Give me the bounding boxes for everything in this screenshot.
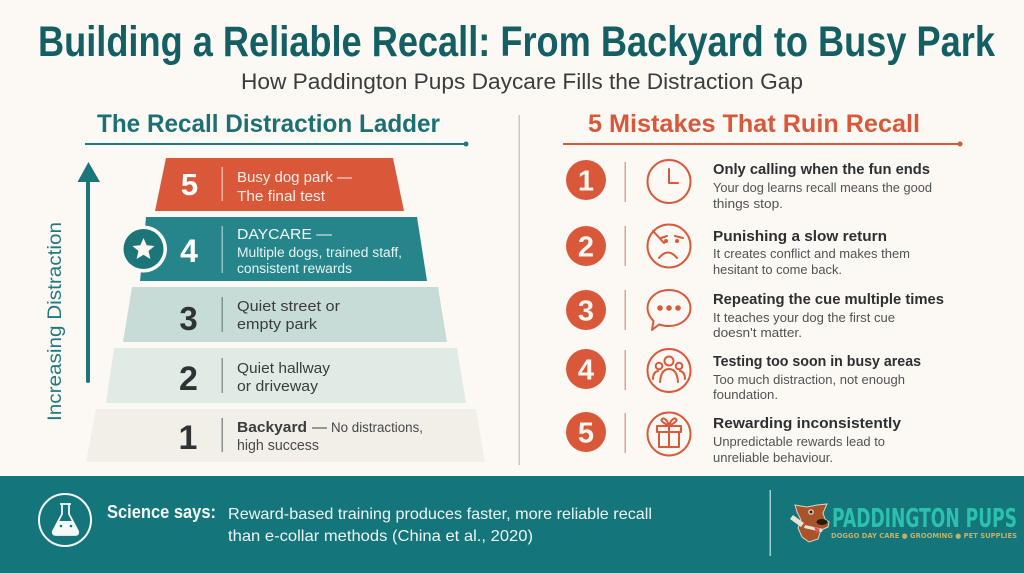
step 4: daycare: DAYCARE — xyxy=(237,226,332,243)
step 2: quiet hallway xyxy=(106,348,466,403)
step 4: daycare xyxy=(140,217,427,281)
step 5: busy dog park: Busy dog park — xyxy=(237,169,352,186)
science says label: Science says: xyxy=(107,502,216,522)
logo: Paddington Pups xyxy=(790,504,1017,542)
step 1: backyard: high success xyxy=(237,437,319,454)
mistake 4 xyxy=(566,349,921,402)
mistake 2: hesitant to come back. xyxy=(713,262,842,277)
icon: group of people xyxy=(648,349,690,392)
icon: sad face xyxy=(648,224,690,268)
heading: ladder: The Recall Distraction Ladder xyxy=(97,110,440,138)
axis label: Increasing Distraction xyxy=(45,222,66,421)
mistake 2: 2 xyxy=(578,232,594,264)
column divider xyxy=(518,115,520,465)
science statement: Reward-based training produces faster, more reliable recall xyxy=(228,506,652,523)
mistake 2: Punishing a slow return xyxy=(713,228,887,245)
mistake 3 xyxy=(566,290,944,340)
mistake 5: 5 xyxy=(578,418,594,450)
step 2: quiet hallway: 2 xyxy=(179,360,198,398)
mistake 3: doesn't matter. xyxy=(713,325,802,340)
step 3: quiet street: 3 xyxy=(179,300,198,337)
icon: clock xyxy=(648,160,690,203)
science statement xyxy=(228,506,652,545)
icon: gift box xyxy=(648,412,690,456)
step 4: daycare: consistent rewards xyxy=(237,261,352,276)
mistake 1: 1 xyxy=(578,166,594,198)
arrow: increasing distraction xyxy=(78,162,100,383)
icon: speech bubble xyxy=(648,290,690,330)
mistake 1: Only calling when the fun ends xyxy=(713,161,930,178)
step 1: backyard: 1 xyxy=(179,419,197,457)
icon: flask xyxy=(39,494,91,546)
mistake 5 xyxy=(566,412,902,465)
panel: science footer band xyxy=(0,476,1024,573)
step 1: backyard: — xyxy=(312,419,327,436)
mistake 4: Too much distraction, not enough xyxy=(713,372,905,387)
mistake 3: 3 xyxy=(578,296,594,328)
step 1: backyard: No distractions, xyxy=(331,420,423,435)
heading underline: mistakes xyxy=(563,142,962,146)
mistake 2 xyxy=(566,224,910,277)
icon: star badge xyxy=(120,226,167,272)
mistake 5: Rewarding inconsistently xyxy=(713,415,902,432)
panel: 5 mistakes xyxy=(563,110,962,465)
mistake 4: foundation. xyxy=(713,387,778,402)
mistake 2: It creates conflict and makes them xyxy=(713,246,910,261)
logo tagline: DOGGO DAY CARE ● GROOMING ● PET SUPPLIES xyxy=(831,532,1017,540)
mistake 5: Unpredictable rewards lead to xyxy=(713,434,885,449)
step 2: quiet hallway: Quiet hallway xyxy=(237,360,331,377)
step 2: quiet hallway: or driveway xyxy=(237,378,319,395)
step 4: daycare: 4 xyxy=(180,233,198,269)
step 3: quiet street: Quiet street or xyxy=(237,298,340,315)
icon: dog mascot xyxy=(790,504,829,542)
step 4: daycare: Multiple dogs, trained staff, xyxy=(237,245,402,260)
mistake 4: 4 xyxy=(578,354,594,386)
step 5: busy dog park xyxy=(155,158,404,211)
science statement: than e-collar methods (China et al., 2020) xyxy=(228,528,533,545)
mistake 1 xyxy=(566,160,932,211)
heading underline: ladder xyxy=(85,142,468,146)
step 3: quiet street xyxy=(123,287,447,342)
mistake 4: Testing too soon in busy areas xyxy=(713,353,921,370)
subtitle: How Paddington Pups Daycare Fills the Distraction Gap xyxy=(241,69,803,94)
mistake 5: unreliable behaviour. xyxy=(713,450,833,465)
mistake 1: Your dog learns recall means the good xyxy=(713,180,932,195)
step 5: busy dog park: 5 xyxy=(181,167,198,202)
mistake 3: It teaches your dog the first cue xyxy=(713,310,895,325)
step 5: busy dog park: The final test xyxy=(237,188,326,205)
step 1: backyard: Backyard xyxy=(237,419,307,436)
mistake 1: things stop. xyxy=(713,196,783,211)
panel: recall distraction ladder xyxy=(45,110,485,462)
step 3: quiet street: empty park xyxy=(237,316,318,333)
mistake 3: Repeating the cue multiple times xyxy=(713,291,944,308)
footer divider xyxy=(770,490,771,556)
heading: mistakes: 5 Mistakes That Ruin Recall xyxy=(588,110,920,138)
step 1: backyard xyxy=(86,409,485,462)
